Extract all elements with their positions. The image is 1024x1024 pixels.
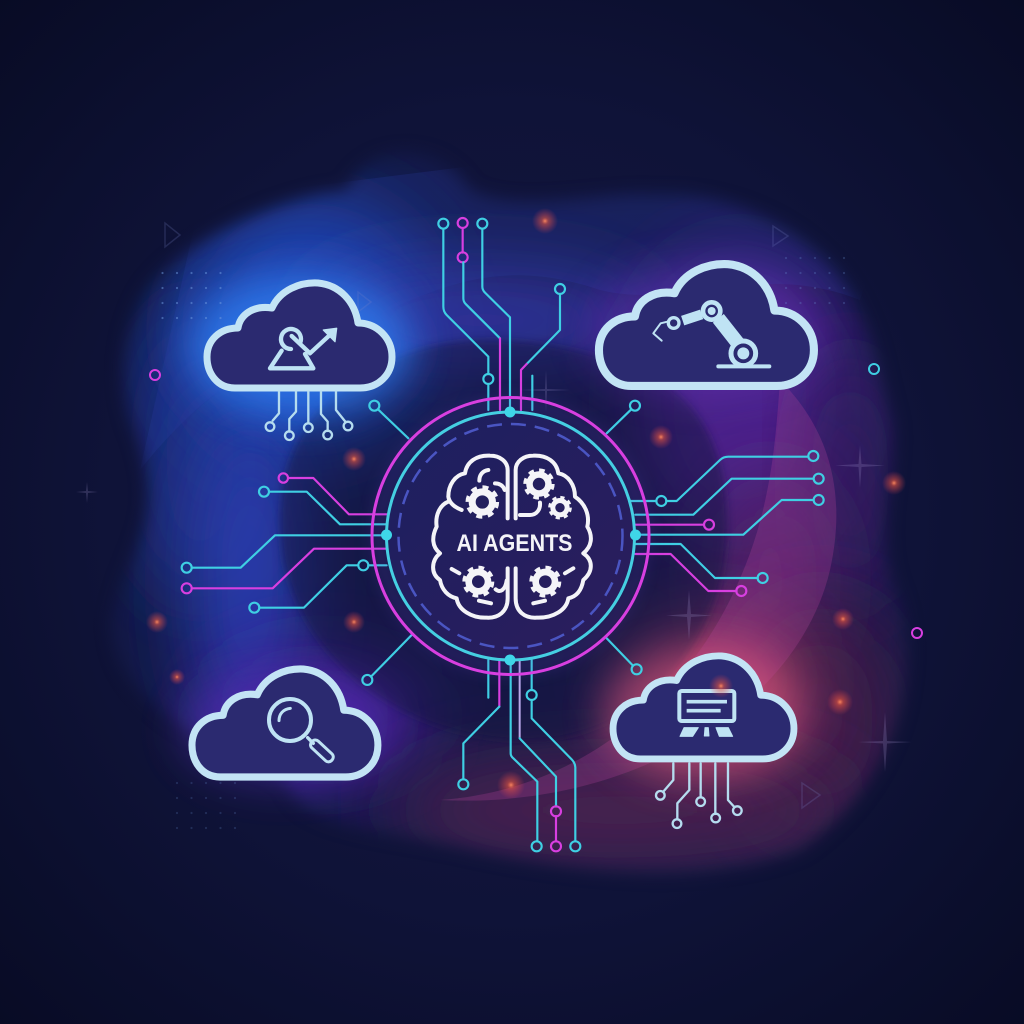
gears	[464, 470, 570, 596]
cloud connector traces	[656, 763, 742, 828]
icon: monitor	[679, 691, 734, 736]
cloud: robot arm	[599, 264, 814, 386]
cloud: analytics	[207, 283, 392, 440]
red glowing particles	[146, 208, 906, 799]
decorative dot grids	[154, 248, 855, 830]
decorative sparkle stars	[76, 370, 912, 772]
cloud: search	[192, 669, 378, 777]
brain outline	[433, 456, 591, 618]
circuit traces: top	[438, 218, 565, 410]
icon: growth chart	[270, 328, 337, 368]
brain icon	[433, 456, 591, 618]
circuit traces: right	[630, 451, 824, 596]
circuit traces: bottom	[458, 660, 580, 851]
decorative triangles	[165, 223, 820, 808]
loose accent circles	[150, 364, 922, 638]
central hub	[372, 398, 649, 674]
ring node dots	[381, 406, 641, 666]
cloud connector traces	[266, 392, 352, 440]
ring glow	[380, 405, 642, 667]
cyan ring	[386, 412, 634, 660]
background: organic glow layers	[114, 154, 909, 876]
red particle in cloud	[709, 674, 733, 698]
hub disc	[386, 412, 634, 660]
icon: magnifying glass	[269, 699, 335, 764]
circuit traces: left	[182, 473, 387, 613]
cloud: interface	[613, 656, 794, 828]
title: AI AGENTS: AI AGENTS	[456, 530, 572, 557]
dashed inner ring	[398, 424, 622, 648]
diagonal connectors	[362, 401, 642, 685]
cloud glows	[179, 265, 825, 785]
icon: robot arm	[653, 302, 769, 366]
outer magenta ring	[372, 398, 649, 674]
